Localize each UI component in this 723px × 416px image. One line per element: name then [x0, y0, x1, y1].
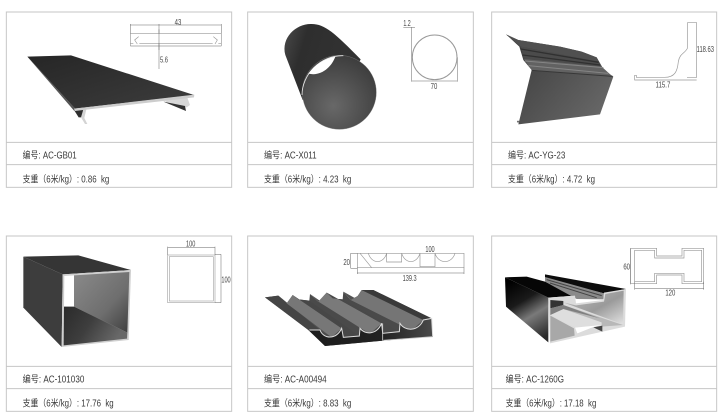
- label: model AC-X011: 编号: AC-X011: [264, 150, 317, 162]
- diagram: A00494 section: 139.3: [403, 274, 417, 283]
- panel: AC-A00494: [248, 236, 473, 411]
- label: weight 8.83 kg: 支重（6米/kg）: 8.83 kg: [264, 397, 351, 409]
- label: weight 17.76 kg: 支重（6米/kg）: 17.76 kg: [23, 397, 114, 409]
- label: weight 0.86 kg: 支重（6米/kg）: 0.86 kg: [23, 173, 109, 185]
- label: weight 4.72 kg: 支重（6米/kg）: 4.72 kg: [508, 173, 595, 185]
- diagram: YG-23 section: [635, 23, 714, 90]
- diagram: YG-23 section: 118.63: [697, 45, 714, 54]
- label: model AC-YG-23: 编号: AC-YG-23: [508, 150, 565, 162]
- diagram: GB01 section: 43: [175, 18, 182, 27]
- diagram: 1260G section: 120: [665, 288, 676, 297]
- label: model AC-GB01: 编号: AC-GB01: [23, 150, 77, 162]
- product: round tube: [285, 24, 376, 129]
- diagram: X011 section: 1.2: [403, 19, 411, 28]
- label: weight 4.23 kg: 支重（6米/kg）: 4.23 kg: [264, 173, 351, 185]
- diagram: A00494 section: 100: [425, 245, 435, 254]
- diagram: A00494 section: [343, 245, 464, 283]
- diagram: X011 section: [403, 19, 457, 91]
- diagram: 1260G section: [623, 248, 704, 297]
- diagram: GB01 section: [130, 18, 221, 69]
- diagram: A00494 section: 20: [343, 258, 350, 267]
- panel: AC-X011: [248, 12, 473, 187]
- product: corrugated panel: [265, 290, 433, 346]
- diagram: YG-23 section: 115.7: [656, 81, 671, 90]
- panel: AC-GB01: [6, 12, 232, 187]
- diagram: 1260G section: 60: [623, 262, 630, 271]
- product: square tube: [23, 255, 131, 347]
- label: model AC-A00494: 编号: AC-A00494: [264, 374, 327, 386]
- diagram: 101030 section: 100: [221, 276, 231, 285]
- diagram: 101030 section: 100: [186, 240, 196, 249]
- diagram: X011 section: 70: [431, 82, 438, 91]
- panel: AC-101030: [6, 236, 232, 411]
- diagram: 101030 section: [168, 240, 231, 303]
- label: weight 17.18 kg: 支重（6米/kg）: 17.18 kg: [506, 397, 596, 409]
- product: H-section profile: [505, 274, 626, 343]
- label: model AC-101030: 编号: AC-101030: [23, 374, 84, 386]
- diagram: GB01 section: 5.6: [160, 56, 168, 65]
- product: flat cover profile: [27, 55, 194, 124]
- label: model AC-1260G: 编号: AC-1260G: [506, 374, 564, 386]
- product: gutter profile: [506, 34, 613, 124]
- panel: AC-1260G: [492, 236, 717, 411]
- panel: AC-YG-23: [492, 12, 717, 187]
